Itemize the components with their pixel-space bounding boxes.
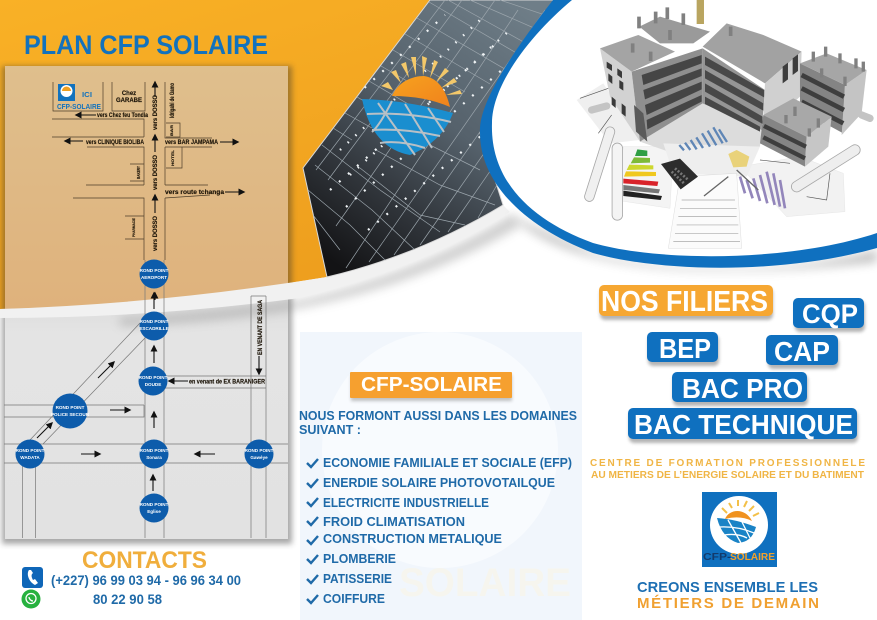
glasses <box>704 170 758 196</box>
badge background <box>350 372 512 398</box>
logo circle <box>710 496 768 554</box>
phone numbers line 2: 80 22 90 58 <box>93 591 162 607</box>
map label en venant de Saga: EN VENANT DE SAGA <box>258 299 264 355</box>
map label CFP-SOLAIRE: CFP-SOLAIRE <box>57 104 101 111</box>
left wing dark door <box>634 105 647 142</box>
curve shadow <box>510 215 877 271</box>
centre description line 1: CENTRE DE FORMATION PROFESSIONNELE <box>590 458 865 469</box>
back right block walls <box>800 63 845 133</box>
right wing windows <box>783 54 798 83</box>
columns on roofs <box>633 7 731 61</box>
badge: BAC TECHNIQUE: BAC TECHNIQUE <box>634 409 853 440</box>
watermark circle <box>322 332 558 568</box>
right wing end wall <box>763 52 802 132</box>
small rolls <box>592 106 870 118</box>
left wing outer wall <box>600 48 640 142</box>
badge: BAC PRO: BAC PRO <box>682 373 803 404</box>
panel surface <box>303 0 560 277</box>
intro text line 1: NOUS FORMONT AUSSI DANS LES DOMAINES <box>299 409 577 423</box>
document <box>668 173 742 248</box>
back right block columns <box>813 47 863 86</box>
document text lines <box>673 200 740 242</box>
roundabout centre: ROND POINT <box>140 448 169 453</box>
item 3: ELECTRICITE INDUSTRIELLE <box>323 496 489 510</box>
map logo circle <box>60 85 72 97</box>
roundabout aeroport: ROND POINT <box>140 268 169 273</box>
roundabout centre: Sonara <box>146 455 162 460</box>
badge: nos filiers: NOS FILIERS <box>601 286 768 318</box>
solar panel <box>303 0 570 277</box>
badge: CAP: CAP <box>774 336 830 367</box>
domain list <box>307 456 572 606</box>
calculator <box>661 159 698 189</box>
front block columns <box>786 107 818 137</box>
roundabout escadrille: ESCADRILLE <box>139 326 169 331</box>
roundabout police secour: ROND POINT <box>56 405 85 410</box>
roundabout right: ROND POINT <box>245 448 274 453</box>
item 1: ECONOMIE FAMILIALE ET SOCIALE (EFP) <box>323 456 572 470</box>
contacts <box>22 547 241 608</box>
logo sun <box>725 511 752 521</box>
title: PLAN CFP SOLAIRE <box>24 30 268 60</box>
rolled plan middle <box>600 148 634 215</box>
contacts heading: CONTACTS <box>82 547 207 574</box>
panel: CFP-Solaire domains <box>299 332 582 620</box>
roundabout doude: ROND POINT <box>139 375 168 380</box>
roundabout eglise: ROND POINT <box>140 502 169 507</box>
map label vertical street: Idrigahi de Gamo <box>170 83 176 118</box>
badge shadow <box>351 375 512 401</box>
map label vers Dosso 2: vers DOSSO <box>153 155 159 190</box>
map grey area <box>5 288 288 539</box>
roundabout police secour <box>51 394 90 428</box>
white swoosh band <box>0 205 520 326</box>
roundabout escadrille <box>139 312 169 340</box>
left wing roof <box>600 35 675 72</box>
map label small box 2: HOTEL <box>170 149 175 166</box>
logo panel lines <box>367 101 451 155</box>
roundabout wadata <box>16 440 45 468</box>
back right block roof <box>800 53 867 85</box>
intro text line 2: SUIVANT : <box>299 423 361 437</box>
centre description line 2: AU METIERS DE L’ENERGIE SOLAIRE ET DU BATIMENT <box>591 470 864 481</box>
right wing roof <box>703 23 802 83</box>
roundabout doude <box>138 366 168 396</box>
map label small box 4: PHARMACIE <box>131 218 136 237</box>
map label small box 1: BAR <box>169 125 174 136</box>
logo rays <box>722 500 759 516</box>
roundabout wadata: ROND POINT <box>16 448 45 453</box>
calculator keys <box>672 168 688 183</box>
roundabout doude: DOUDE <box>145 382 161 387</box>
map label vers Dosso 3: vers DOSSO <box>153 216 159 251</box>
plan sheets <box>577 83 845 217</box>
roundabout aeroport: AEROPORT <box>141 275 167 280</box>
right wing courtyard wall <box>703 48 765 130</box>
roundabout eglise <box>140 494 169 522</box>
orange background <box>0 0 430 309</box>
front block walls <box>760 115 807 167</box>
item 6: PLOMBERIE <box>323 552 396 566</box>
map label vers bar: vers BAR JAMPAMA <box>165 140 219 146</box>
crane mast <box>697 0 704 24</box>
rolled plan right <box>797 150 855 187</box>
left wing windows <box>607 62 626 117</box>
logo background <box>702 492 777 567</box>
back right block floors <box>802 75 844 123</box>
map label en venant de ex baraniger: en venant de EX BARANIGER <box>189 380 266 386</box>
panel background <box>300 332 582 620</box>
map label small box 3: BAKERY <box>136 166 141 179</box>
yellow note <box>728 150 749 167</box>
logo blue panel globe <box>362 99 453 155</box>
roundabout escadrille: ROND POINT <box>140 319 169 324</box>
CFP-Solaire logo <box>702 492 777 567</box>
slogan line 2: MÉTIERS DE DEMAIN <box>637 595 819 612</box>
map logo <box>58 84 75 101</box>
phone numbers line 1: (+227) 96 99 03 94 - 96 96 34 00 <box>51 572 241 588</box>
white area <box>492 0 877 256</box>
map label vers Chez feu Tondia: vers Chez feu Tondia <box>97 113 149 119</box>
roundabout right: Gawéye <box>250 455 268 460</box>
badge: BEP: BEP <box>659 333 711 364</box>
logo sun rays <box>381 56 462 95</box>
icon: phone <box>22 567 43 588</box>
upper floor roof <box>639 17 710 43</box>
item 5: CONSTRUCTION METALIQUE <box>323 532 502 546</box>
roundabout police secour: POLICE SECOUR <box>51 412 90 417</box>
panel cell grid <box>308 0 570 268</box>
blue bar chart <box>679 127 727 150</box>
map tan area <box>5 66 288 309</box>
watermark text: SOLAIRE <box>399 561 571 605</box>
map label vers route: vers route tchanga <box>165 190 225 196</box>
slogan line 1: CREONS ENSEMBLE LES <box>637 579 818 596</box>
map label Garabe: GARABE <box>116 98 142 104</box>
item 4: FROID CLIMATISATION <box>323 515 465 529</box>
blue curve and white building area <box>480 0 877 271</box>
map panel <box>2 66 292 544</box>
front block roof <box>763 98 832 137</box>
roundabout right <box>244 440 274 468</box>
left wing floors <box>642 55 702 129</box>
logo cell lines <box>719 520 754 543</box>
map label vers Dosso 1: vers DOSSO <box>153 95 159 130</box>
roundabout centre <box>140 440 169 468</box>
building illustration <box>577 0 870 248</box>
map label vers clinique: vers CLINIQUE BIOLIBA <box>86 140 145 146</box>
logo solar cells <box>717 518 756 543</box>
item 2: ENERDIE SOLAIRE PHOTOVOTAILQUE <box>323 476 555 490</box>
badge <box>350 372 512 401</box>
map logo square <box>58 84 75 101</box>
map label Chez Garabe: Chez <box>122 91 136 97</box>
map label ICI: ICI <box>82 92 92 99</box>
swoosh shadow <box>120 214 520 326</box>
logo sun <box>392 76 450 107</box>
roundabout aeroport <box>140 260 169 288</box>
map logo sun <box>62 87 71 91</box>
roundabout eglise: Eglise <box>147 509 161 514</box>
rolled plan left <box>589 132 610 197</box>
item 8: COIFFURE <box>323 592 385 606</box>
purple bar chart <box>740 172 785 208</box>
roundabout wadata: WADATA <box>20 455 40 460</box>
logo wordmark: CFP- <box>703 552 731 563</box>
blue band <box>480 0 877 268</box>
badge shadows <box>600 288 865 443</box>
left wing courtyard wall <box>632 48 703 142</box>
road lines lower <box>4 260 288 538</box>
street map <box>4 82 288 538</box>
right wing floors <box>705 57 764 132</box>
logo wordmark orange: SOLAIRE <box>730 552 775 563</box>
badge: CQP: CQP <box>802 299 858 329</box>
front block floors <box>763 126 806 158</box>
road lines upper <box>52 82 212 260</box>
icon: whatsapp <box>22 590 40 608</box>
badge text: CFP-SOLAIRE <box>361 374 502 396</box>
item 7: PATISSERIE <box>323 572 392 586</box>
map shadow <box>2 66 292 544</box>
programmes badges <box>599 285 865 443</box>
energy label <box>623 149 662 200</box>
swoosh band <box>0 205 510 318</box>
arrows <box>37 82 259 491</box>
